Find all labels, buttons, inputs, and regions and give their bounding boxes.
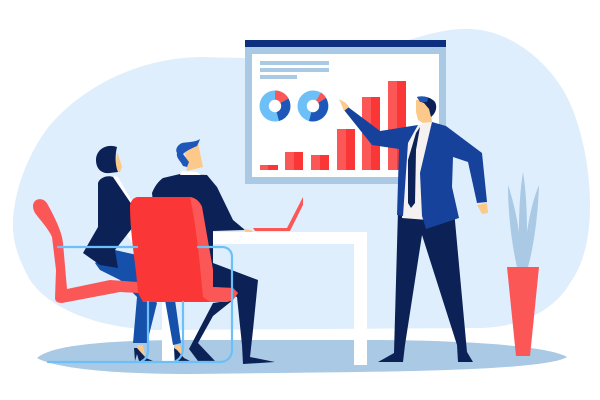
hand [244, 229, 253, 232]
bar chart [260, 81, 406, 170]
near leg [213, 263, 275, 364]
front red chair [130, 197, 238, 302]
blue chair frame [48, 247, 232, 362]
face [184, 143, 203, 171]
right shoe [174, 348, 190, 361]
floor shadow [37, 340, 567, 374]
hair [176, 139, 200, 167]
shirt [402, 122, 432, 220]
man seated [152, 139, 275, 364]
white shirt [113, 176, 135, 247]
background blob [13, 29, 590, 330]
jacket [83, 176, 133, 268]
collar [180, 171, 201, 175]
face [416, 100, 432, 123]
pointing hand [339, 99, 349, 111]
presentation board [245, 40, 446, 184]
hair [417, 96, 436, 117]
donut chart left [260, 90, 290, 122]
far leg [189, 300, 233, 361]
blue legs [95, 250, 157, 343]
text lines [260, 61, 329, 79]
torso [152, 174, 245, 270]
back chair: woman [33, 199, 138, 303]
hair [96, 146, 118, 173]
presenter [339, 96, 488, 362]
right hand [477, 203, 488, 214]
left shoe [134, 348, 153, 361]
donut chart right [298, 90, 328, 122]
face [115, 152, 122, 172]
woman [83, 146, 190, 361]
table [162, 232, 367, 365]
trousers [378, 210, 473, 362]
jacket and arms [344, 107, 487, 229]
ankles [137, 345, 183, 356]
laptop [253, 197, 303, 231]
tie [408, 127, 420, 208]
plant in red vase [507, 172, 539, 356]
